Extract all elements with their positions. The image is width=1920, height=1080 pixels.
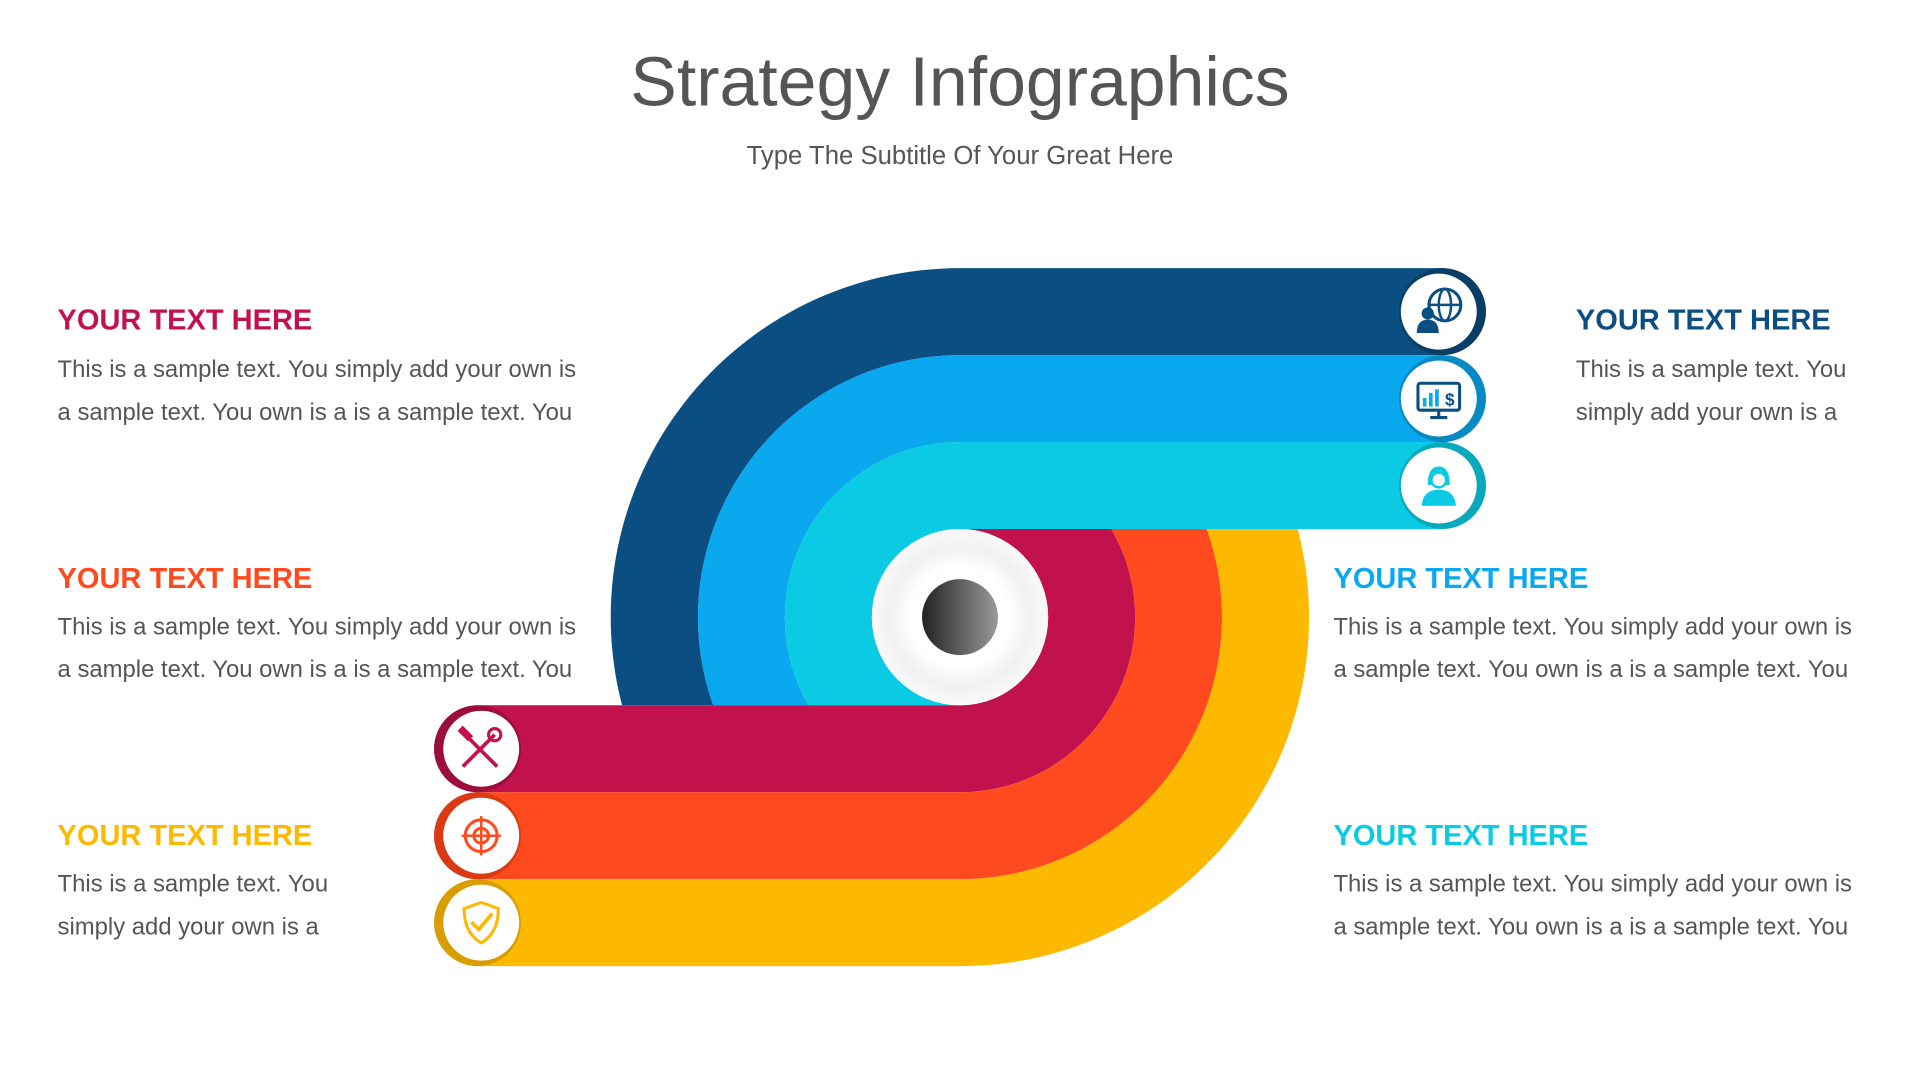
text block: left 2: YOUR TEXT HERE — [58, 563, 312, 595]
band: dark blue — [611, 268, 1486, 705]
text block: left 2: a sample text. You own is a is a sample text. You — [58, 656, 572, 683]
text block: left 2: This is a sample text. You simply add your own is — [58, 613, 576, 640]
band: orange — [434, 529, 1222, 879]
band: blue — [698, 355, 1486, 705]
text block: right 3: YOUR TEXT HERE — [1333, 820, 1588, 852]
text block: right 2: a sample text. You own is a is a sample text. You — [1333, 656, 1848, 683]
text block: right 2: YOUR TEXT HERE — [1333, 563, 1588, 595]
text block: right 2 — [1333, 563, 1852, 683]
subtitle: Type The Subtitle Of Your Great Here — [747, 142, 1173, 170]
text block: left 3: YOUR TEXT HERE — [58, 820, 312, 852]
band: yellow — [434, 529, 1309, 966]
text block: right 1: This is a sample text. You — [1576, 356, 1846, 383]
text block: left 3 — [58, 820, 328, 940]
text block: right 1 — [1576, 304, 1846, 426]
text block: left 1: a sample text. You own is a is a sample text. You — [58, 399, 572, 426]
text block: right 3: This is a sample text. You simply add your own is — [1333, 870, 1852, 897]
text block: left 1: YOUR TEXT HERE — [58, 304, 312, 336]
text block: right 3 — [1333, 820, 1852, 940]
band: red — [434, 529, 1135, 792]
text block: left 3: This is a sample text. You — [58, 870, 328, 897]
icon: target — [434, 792, 521, 879]
icon: monitor dollar — [1399, 355, 1486, 442]
center circle — [872, 529, 1048, 705]
icon: shield check — [434, 879, 521, 966]
text block: right 1: simply add your own is a — [1576, 399, 1838, 426]
icon: monitor dollar: $ — [1445, 389, 1455, 409]
text block: left 1 — [58, 304, 576, 426]
title: Strategy Infographics — [630, 42, 1290, 120]
icon: woman — [1399, 442, 1486, 529]
text block: left 1: This is a sample text. You simply add your own is — [58, 356, 576, 383]
text block: right 2: This is a sample text. You simply add your own is — [1333, 613, 1852, 640]
icon: globe person — [1399, 268, 1486, 355]
text block: right 1: YOUR TEXT HERE — [1576, 304, 1831, 336]
band: cyan — [785, 442, 1486, 705]
text block: left 3: simply add your own is a — [58, 913, 320, 940]
text block: right 3: a sample text. You own is a is a sample text. You — [1333, 913, 1848, 940]
text block: left 2 — [58, 563, 576, 683]
icon: tools — [434, 705, 521, 792]
